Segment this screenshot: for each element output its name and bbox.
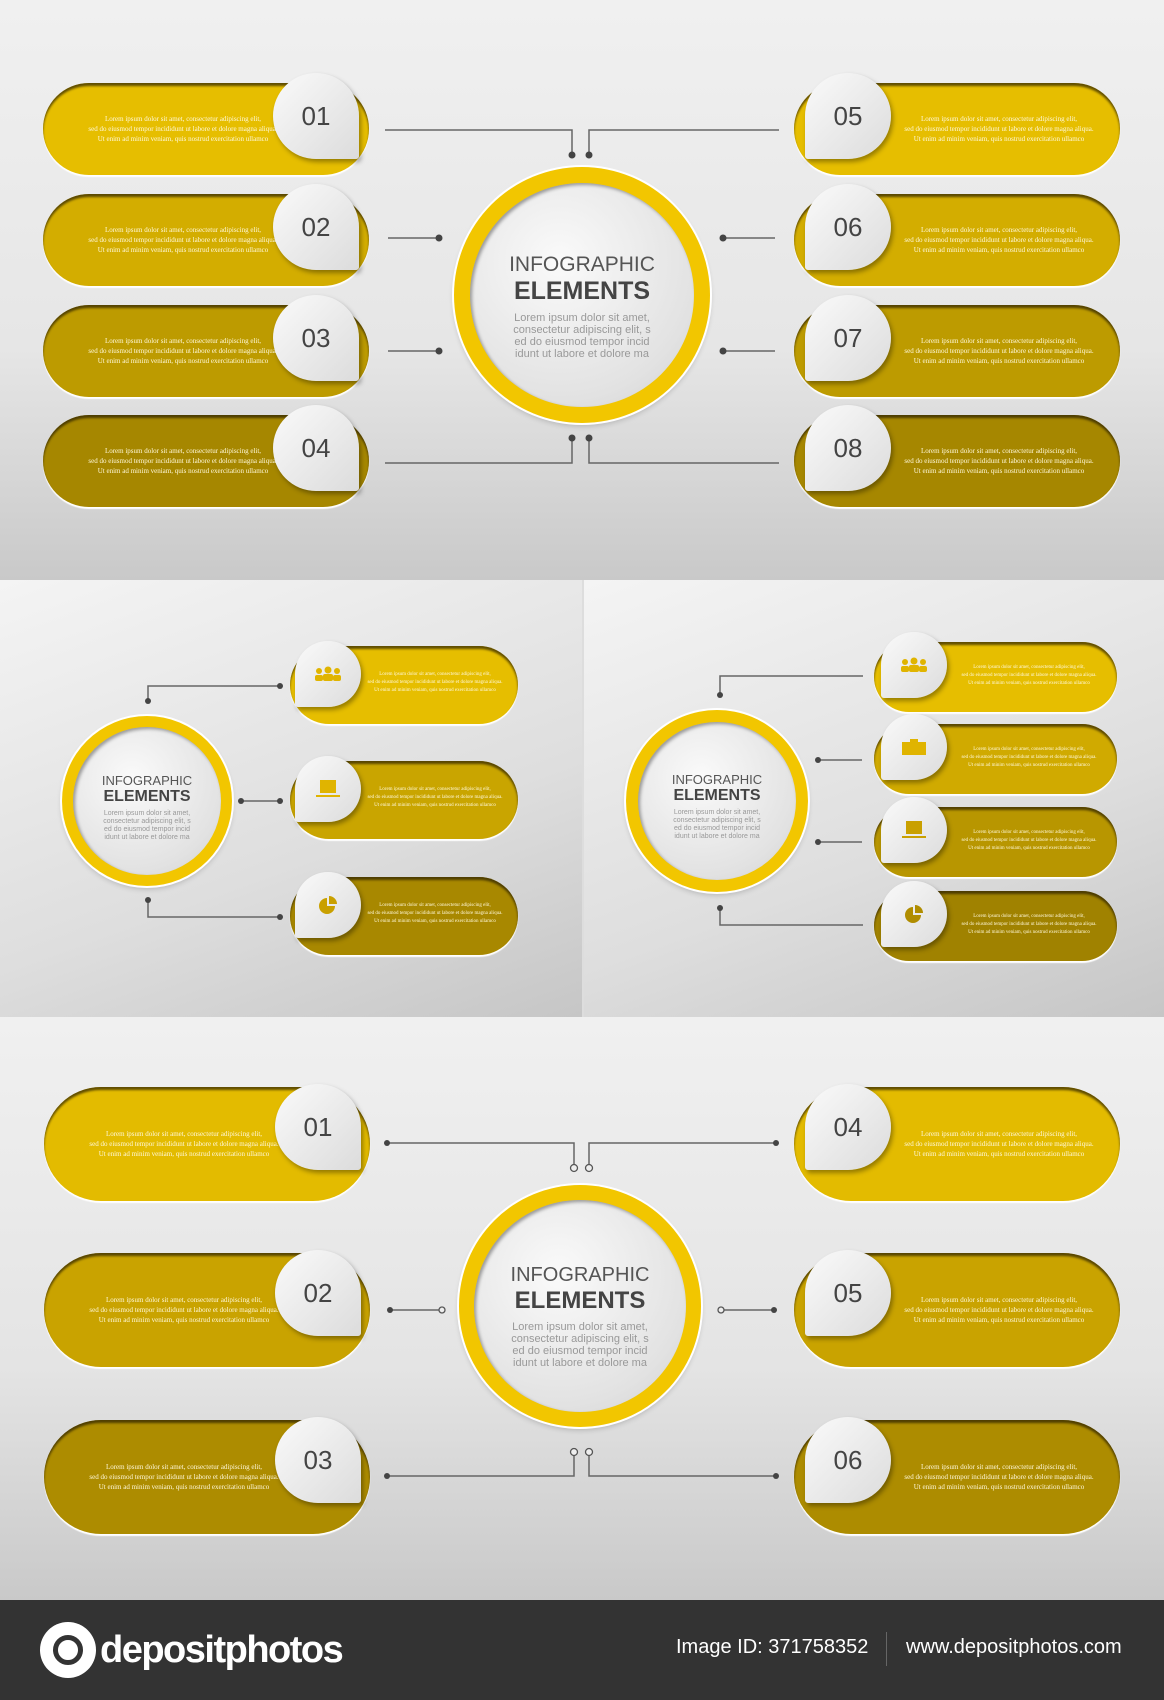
background: top section [0, 0, 1164, 580]
pill 03 [43, 305, 369, 397]
mid-right pill 4: pie icon: Lorem ipsum dolor sit amet, consectetur adipiscing elit, [973, 914, 1085, 919]
pill 05: Lorem ipsum dolor sit amet, consectetur adipiscing elit, [921, 115, 1077, 123]
center circle bottom: idunt ut labore et dolore ma [513, 1357, 647, 1369]
pill 06: sed do eiusmod tempor incididunt ut labore et dolore magna aliqua. [904, 236, 1094, 244]
mid-left pill 3: pie icon [290, 877, 518, 955]
center circle middle left: INFOGRAPHIC [102, 773, 192, 788]
bottom pill 01: 01 [304, 1112, 332, 1142]
center circle middle right: Lorem ipsum dolor sit amet, [674, 809, 760, 816]
pill 01: Lorem ipsum dolor sit amet, consectetur adipiscing elit, [105, 115, 261, 123]
bottom pill 06: Ut enim ad minim veniam, quis nostrud exercitation ullamco [914, 1483, 1084, 1491]
mid-right pill 3: monitor icon: sed do eiusmod tempor incididunt ut labore et dolore magna aliqua. [961, 838, 1097, 843]
bottom pill 06 [794, 1420, 1120, 1534]
center circle middle right [626, 710, 808, 892]
footer logo: depositphotos [100, 1628, 342, 1670]
footer [0, 1600, 1164, 1700]
pill 05: Ut enim ad minim veniam, quis nostrud exercitation ullamco [914, 135, 1084, 143]
bottom pill 05: 05 [834, 1278, 862, 1308]
center circle top: ELEMENTS [514, 277, 650, 305]
mid-right pill 4: pie icon: Ut enim ad minim veniam, quis nostrud exercitation ullamco [968, 930, 1090, 935]
bottom pill 04: sed do eiusmod tempor incididunt ut labore et dolore magna aliqua. [904, 1140, 1094, 1148]
center circle top [454, 167, 710, 423]
bottom pill 03: Lorem ipsum dolor sit amet, consectetur adipiscing elit, [106, 1463, 262, 1471]
pill 07: Ut enim ad minim veniam, quis nostrud exercitation ullamco [914, 357, 1084, 365]
mid-right pill 3: monitor icon: Ut enim ad minim veniam, quis nostrud exercitation ullamco [968, 846, 1090, 851]
pill 02: Ut enim ad minim veniam, quis nostrud exercitation ullamco [98, 246, 268, 254]
mid-left pill 2: monitor icon: Ut enim ad minim veniam, quis nostrud exercitation ullamco [374, 803, 496, 808]
pill 03: 03 [302, 322, 330, 352]
center circle top: consectetur adipiscing elit, s [513, 324, 651, 336]
center circle middle left: consectetur adipiscing elit, s [103, 818, 191, 825]
footer info: Image ID: 371758352 [676, 1636, 868, 1658]
pill 02 [43, 194, 369, 286]
pill 04: 04 [302, 432, 330, 462]
bottom pill 02: Lorem ipsum dolor sit amet, consectetur adipiscing elit, [106, 1296, 262, 1304]
center circle bottom: Lorem ipsum dolor sit amet, [512, 1321, 648, 1333]
bottom pill 06: sed do eiusmod tempor incididunt ut labore et dolore magna aliqua. [904, 1473, 1094, 1481]
center circle middle right: INFOGRAPHIC [672, 772, 762, 787]
background: bottom section [0, 1017, 1164, 1600]
pill 06: 06 [834, 212, 862, 242]
mid-right pill 4: pie icon [874, 891, 1117, 961]
center circle middle left: Lorem ipsum dolor sit amet, [104, 810, 190, 817]
pill 08: 08 [834, 432, 862, 462]
bottom pill 03 [44, 1420, 370, 1534]
pill 07: sed do eiusmod tempor incididunt ut labore et dolore magna aliqua. [904, 347, 1094, 355]
pill 05: 05 [834, 100, 862, 130]
center circle top: INFOGRAPHIC [509, 253, 655, 276]
pill 04: sed do eiusmod tempor incididunt ut labore et dolore magna aliqua. [88, 457, 278, 465]
pill 07 [794, 305, 1120, 397]
pill 07: Lorem ipsum dolor sit amet, consectetur adipiscing elit, [921, 337, 1077, 345]
pill 08: Ut enim ad minim veniam, quis nostrud exercitation ullamco [914, 467, 1084, 475]
mid-left pill 3: pie icon: Ut enim ad minim veniam, quis nostrud exercitation ullamco [374, 919, 496, 924]
bottom pill 01 [44, 1087, 370, 1201]
mid-left pill 2: monitor icon: Lorem ipsum dolor sit amet, consectetur adipiscing elit, [379, 787, 491, 792]
center circle middle left: ed do eiusmod tempor incid [104, 826, 190, 833]
center circle bottom: ELEMENTS [515, 1287, 645, 1314]
pill 01: Ut enim ad minim veniam, quis nostrud exercitation ullamco [98, 135, 268, 143]
mid-left pill 1: team icon: Lorem ipsum dolor sit amet, consectetur adipiscing elit, [379, 672, 491, 677]
mid-right pill 2: briefcase icon: Ut enim ad minim veniam, quis nostrud exercitation ullamco [968, 763, 1090, 768]
pill 02: sed do eiusmod tempor incididunt ut labore et dolore magna aliqua. [88, 236, 278, 244]
bottom pill 03: 03 [304, 1444, 332, 1474]
pill 01: 01 [302, 100, 330, 130]
center circle bottom [459, 1185, 701, 1427]
center circle middle left: ELEMENTS [103, 788, 191, 805]
pill 05: sed do eiusmod tempor incididunt ut labore et dolore magna aliqua. [904, 125, 1094, 133]
center circle middle right: consectetur adipiscing elit, s [673, 817, 761, 824]
background: middle left [0, 580, 582, 1017]
bottom pill 04: 04 [834, 1112, 862, 1142]
pill 07: 07 [834, 322, 862, 352]
bottom pill 06: Lorem ipsum dolor sit amet, consectetur adipiscing elit, [921, 1463, 1077, 1471]
bottom pill 02 [44, 1253, 370, 1367]
bottom pill 05: Ut enim ad minim veniam, quis nostrud exercitation ullamco [914, 1316, 1084, 1324]
bottom pill 02: sed do eiusmod tempor incididunt ut labore et dolore magna aliqua. [89, 1306, 279, 1314]
bottom pill 04 [794, 1087, 1120, 1201]
center circle middle right: idunt ut labore et dolore ma [674, 833, 760, 840]
pill 01 [43, 83, 369, 175]
pill 04 [43, 415, 369, 507]
pill 01: sed do eiusmod tempor incididunt ut labore et dolore magna aliqua. [88, 125, 278, 133]
center circle bottom: consectetur adipiscing elit, s [511, 1333, 649, 1345]
mid-right pill 2: briefcase icon: Lorem ipsum dolor sit amet, consectetur adipiscing elit, [973, 747, 1085, 752]
center circle bottom: ed do eiusmod tempor incid [512, 1345, 648, 1357]
pill 02: 02 [302, 212, 330, 242]
center circle middle right: ed do eiusmod tempor incid [674, 825, 760, 832]
bottom pill 02: 02 [304, 1278, 332, 1308]
center circle top: ed do eiusmod tempor incid [514, 336, 650, 348]
bottom pill 03: sed do eiusmod tempor incididunt ut labore et dolore magna aliqua. [89, 1473, 279, 1481]
center circle top: Lorem ipsum dolor sit amet, [514, 312, 650, 324]
center circle top: idunt ut labore et dolore ma [515, 348, 649, 360]
mid-right pill 2: briefcase icon: sed do eiusmod tempor incididunt ut labore et dolore magna aliqua. [961, 755, 1097, 760]
pill 04: Lorem ipsum dolor sit amet, consectetur adipiscing elit, [105, 447, 261, 455]
mid-right pill 4: pie icon: sed do eiusmod tempor incididunt ut labore et dolore magna aliqua. [961, 922, 1097, 927]
bottom pill 05: Lorem ipsum dolor sit amet, consectetur adipiscing elit, [921, 1296, 1077, 1304]
bottom pill 02: Ut enim ad minim veniam, quis nostrud exercitation ullamco [99, 1316, 269, 1324]
mid-right pill 1: team icon [874, 642, 1117, 712]
footer: www.depositphotos.com [906, 1636, 1122, 1658]
pill 02: Lorem ipsum dolor sit amet, consectetur adipiscing elit, [105, 226, 261, 234]
pill 03: Lorem ipsum dolor sit amet, consectetur adipiscing elit, [105, 337, 261, 345]
bottom pill 04: Lorem ipsum dolor sit amet, consectetur adipiscing elit, [921, 1130, 1077, 1138]
mid-left pill 1: team icon: sed do eiusmod tempor incididunt ut labore et dolore magna aliqua. [367, 680, 503, 685]
pill 06: Ut enim ad minim veniam, quis nostrud exercitation ullamco [914, 246, 1084, 254]
mid-left pill 3: pie icon: Lorem ipsum dolor sit amet, consectetur adipiscing elit, [379, 903, 491, 908]
pill 08 [794, 415, 1120, 507]
mid-right pill 3: monitor icon [874, 807, 1117, 877]
bottom pill 05: sed do eiusmod tempor incididunt ut labore et dolore magna aliqua. [904, 1306, 1094, 1314]
mid-right pill 1: team icon: Ut enim ad minim veniam, quis nostrud exercitation ullamco [968, 681, 1090, 686]
mid-left pill 2: monitor icon [290, 761, 518, 839]
pill 06: Lorem ipsum dolor sit amet, consectetur adipiscing elit, [921, 226, 1077, 234]
mid-left pill 1: team icon: Ut enim ad minim veniam, quis nostrud exercitation ullamco [374, 688, 496, 693]
mid-left pill 2: monitor icon: sed do eiusmod tempor incididunt ut labore et dolore magna aliqua. [367, 795, 503, 800]
pill 06 [794, 194, 1120, 286]
center circle middle left: idunt ut labore et dolore ma [104, 834, 190, 841]
pill 08: Lorem ipsum dolor sit amet, consectetur adipiscing elit, [921, 447, 1077, 455]
pill 08: sed do eiusmod tempor incididunt ut labore et dolore magna aliqua. [904, 457, 1094, 465]
center circle middle right: ELEMENTS [673, 787, 761, 804]
bottom pill 05 [794, 1253, 1120, 1367]
mid-left pill 1: team icon [290, 646, 518, 724]
bottom pill 06: 06 [834, 1444, 862, 1474]
bottom pill 01: sed do eiusmod tempor incididunt ut labore et dolore magna aliqua. [89, 1140, 279, 1148]
pill 05 [794, 83, 1120, 175]
center circle bottom: INFOGRAPHIC [511, 1264, 649, 1286]
footer logo [40, 1622, 342, 1678]
bottom pill 01: Lorem ipsum dolor sit amet, consectetur adipiscing elit, [106, 1130, 262, 1138]
pill 04: Ut enim ad minim veniam, quis nostrud exercitation ullamco [98, 467, 268, 475]
mid-right pill 2: briefcase icon [874, 724, 1117, 794]
pill 03: sed do eiusmod tempor incididunt ut labore et dolore magna aliqua. [88, 347, 278, 355]
bottom pill 03: Ut enim ad minim veniam, quis nostrud exercitation ullamco [99, 1483, 269, 1491]
bottom pill 01: Ut enim ad minim veniam, quis nostrud exercitation ullamco [99, 1150, 269, 1158]
mid-left pill 3: pie icon: sed do eiusmod tempor incididunt ut labore et dolore magna aliqua. [367, 911, 503, 916]
mid-right pill 1: team icon: Lorem ipsum dolor sit amet, consectetur adipiscing elit, [973, 665, 1085, 670]
pill 03: Ut enim ad minim veniam, quis nostrud exercitation ullamco [98, 357, 268, 365]
mid-right pill 3: monitor icon: Lorem ipsum dolor sit amet, consectetur adipiscing elit, [973, 830, 1085, 835]
background: middle right [584, 580, 1164, 1017]
mid-right pill 1: team icon: sed do eiusmod tempor incididunt ut labore et dolore magna aliqua. [961, 673, 1097, 678]
center circle middle left [62, 716, 232, 886]
bottom pill 04: Ut enim ad minim veniam, quis nostrud exercitation ullamco [914, 1150, 1084, 1158]
